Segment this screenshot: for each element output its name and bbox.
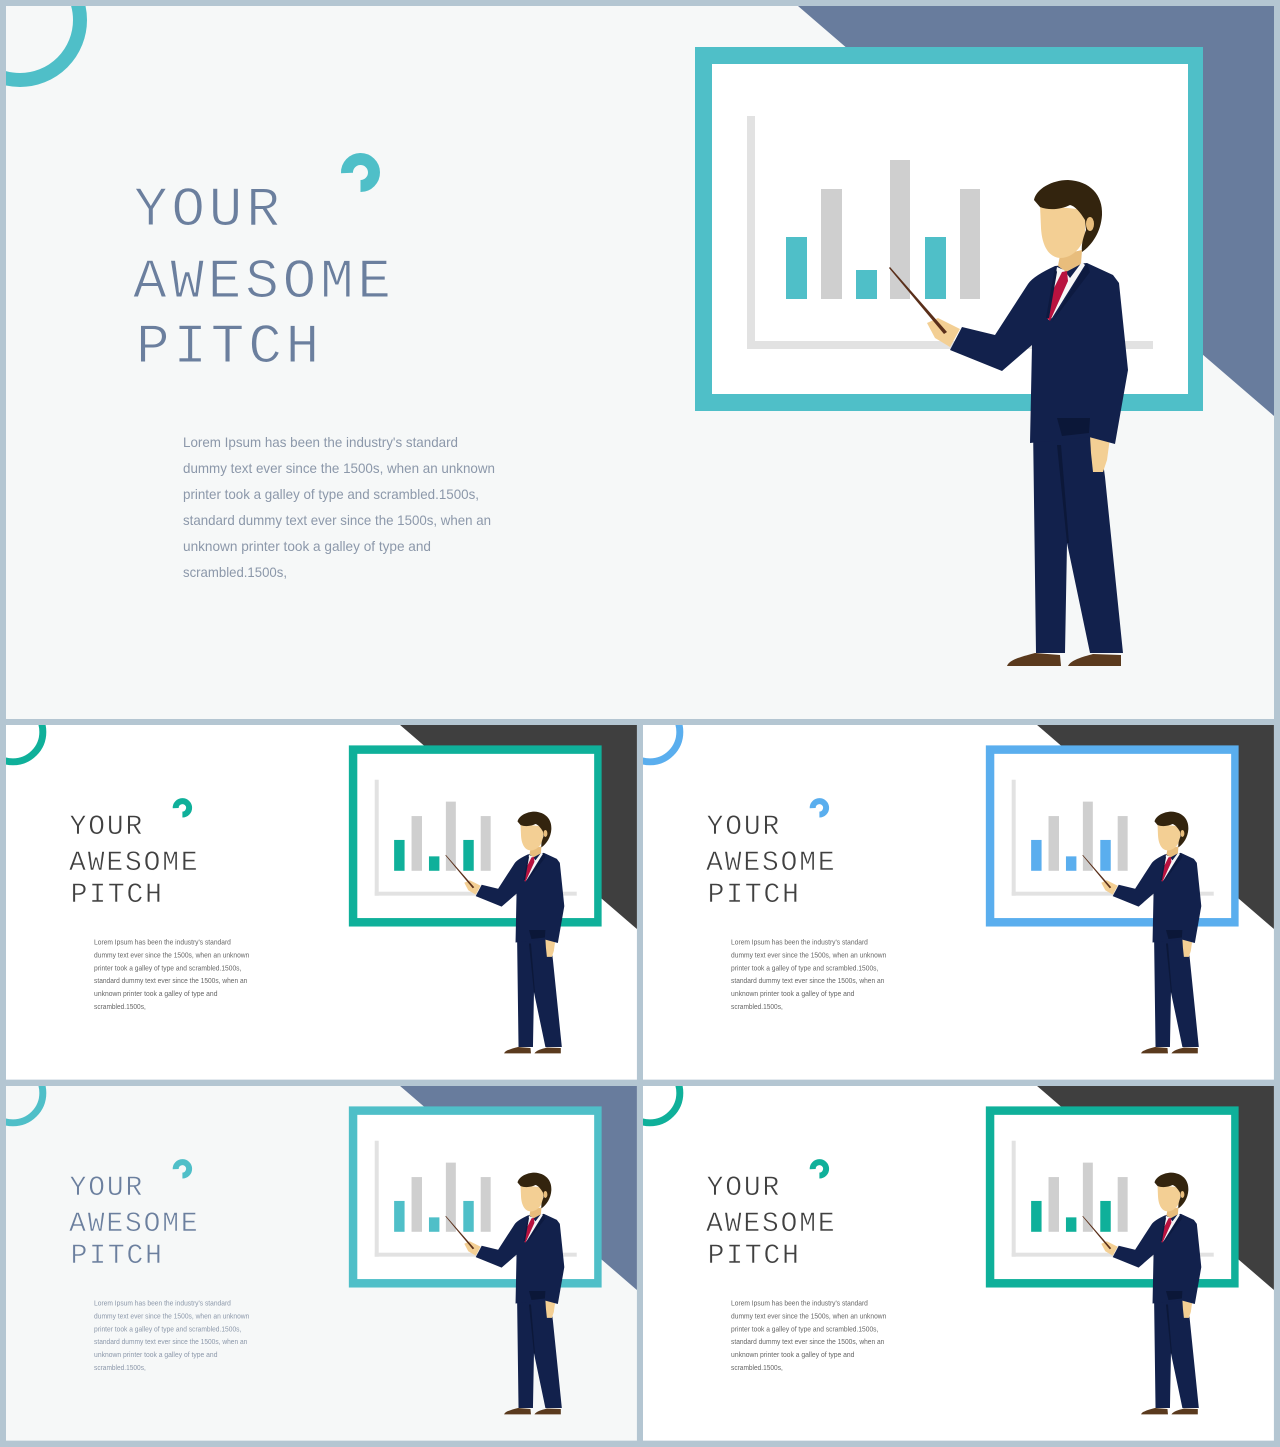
icon: open arc bbox=[813, 801, 826, 815]
text block: printer took a galley of type and scrambled.1500s, bbox=[183, 486, 479, 502]
title: AWESOME bbox=[69, 1209, 199, 1240]
panel: blue slide, top right bbox=[620, 702, 1274, 1080]
title: AWESOME bbox=[133, 250, 395, 314]
text block: standard dummy text ever since the 1500s, when an bbox=[94, 1339, 247, 1346]
icon: open arc bbox=[176, 801, 189, 815]
title: YOUR bbox=[70, 1173, 144, 1204]
title: YOUR bbox=[70, 812, 144, 843]
text block bbox=[183, 434, 495, 580]
icon: open arc bbox=[347, 159, 374, 186]
panel: green slide, top left bbox=[0, 702, 637, 1080]
text block bbox=[94, 939, 249, 1011]
panel: large teal slide bbox=[0, 0, 1274, 719]
board frame bbox=[349, 745, 602, 927]
text block bbox=[731, 939, 886, 1011]
text block: printer took a galley of type and scrambled.1500s, bbox=[731, 965, 878, 972]
board frame bbox=[349, 1106, 602, 1288]
text block: unknown printer took a galley of type and bbox=[94, 1352, 218, 1359]
text block: standard dummy text ever since the 1500s, when an bbox=[731, 1339, 884, 1346]
corner ring bbox=[643, 725, 684, 766]
text block: printer took a galley of type and scrambled.1500s, bbox=[94, 1326, 241, 1333]
bar chart bbox=[747, 116, 1153, 349]
text block: unknown printer took a galley of type and bbox=[94, 991, 218, 998]
text block: standard dummy text ever since the 1500s, when an bbox=[183, 512, 491, 528]
bar chart bbox=[375, 1141, 577, 1257]
presenter figure bbox=[1082, 1173, 1201, 1414]
bar chart bbox=[1012, 1141, 1214, 1257]
text block: standard dummy text ever since the 1500s, when an bbox=[94, 978, 247, 985]
text block: Lorem Ipsum has been the industry's standard bbox=[183, 434, 458, 450]
text block bbox=[94, 1300, 249, 1372]
icon: open arc bbox=[813, 1162, 826, 1176]
text block: Lorem Ipsum has been the industry's standard bbox=[731, 939, 868, 946]
text block: standard dummy text ever since the 1500s, when an bbox=[731, 978, 884, 985]
corner ring bbox=[6, 1086, 46, 1126]
title: YOUR bbox=[707, 812, 781, 843]
text block bbox=[731, 1300, 886, 1372]
text block: dummy text ever since the 1500s, when an unknown bbox=[731, 1313, 886, 1320]
text block: dummy text ever since the 1500s, when an unknown bbox=[731, 952, 886, 959]
text block: printer took a galley of type and scrambled.1500s, bbox=[94, 965, 241, 972]
corner ring bbox=[643, 1086, 684, 1126]
icon: open arc bbox=[176, 1162, 189, 1176]
title: PITCH bbox=[708, 880, 801, 911]
title: PITCH bbox=[708, 1241, 801, 1272]
presenter figure bbox=[445, 812, 564, 1053]
board frame bbox=[986, 745, 1239, 927]
text block: Lorem Ipsum has been the industry's standard bbox=[94, 939, 231, 946]
text block: scrambled.1500s, bbox=[731, 1365, 783, 1372]
corner triangle bbox=[1037, 1086, 1274, 1290]
board frame bbox=[695, 47, 1203, 411]
title bbox=[70, 815, 196, 902]
presenter figure bbox=[445, 1173, 564, 1414]
text block: dummy text ever since the 1500s, when an unknown bbox=[94, 952, 249, 959]
panel: green slide, bottom right bbox=[620, 1063, 1274, 1441]
text block: dummy text ever since the 1500s, when an unknown bbox=[183, 460, 495, 476]
title: YOUR bbox=[134, 178, 284, 242]
text block: scrambled.1500s, bbox=[183, 564, 287, 580]
text block: unknown printer took a galley of type and bbox=[731, 1352, 855, 1359]
title: PITCH bbox=[136, 315, 323, 379]
title: PITCH bbox=[71, 1241, 164, 1272]
corner triangle bbox=[798, 6, 1274, 416]
text block: Lorem Ipsum has been the industry's standard bbox=[731, 1300, 868, 1307]
corner ring bbox=[0, 0, 80, 80]
corner ring bbox=[6, 725, 46, 766]
presenter figure bbox=[1082, 812, 1201, 1053]
title: PITCH bbox=[71, 880, 164, 911]
title: AWESOME bbox=[706, 848, 836, 879]
text block: scrambled.1500s, bbox=[94, 1365, 146, 1372]
text block: printer took a galley of type and scrambled.1500s, bbox=[731, 1326, 878, 1333]
text block: dummy text ever since the 1500s, when an unknown bbox=[94, 1313, 249, 1320]
title: AWESOME bbox=[69, 848, 199, 879]
corner triangle bbox=[1037, 725, 1274, 929]
corner triangle bbox=[400, 1086, 637, 1290]
bar chart bbox=[1012, 780, 1214, 896]
title bbox=[70, 1176, 196, 1263]
text block: unknown printer took a galley of type and bbox=[731, 991, 855, 998]
presenter figure bbox=[889, 180, 1128, 666]
text block: scrambled.1500s, bbox=[731, 1004, 783, 1011]
text block: scrambled.1500s, bbox=[94, 1004, 146, 1011]
title bbox=[706, 815, 833, 902]
corner triangle bbox=[400, 725, 637, 929]
title bbox=[706, 1173, 836, 1272]
title: YOUR bbox=[707, 1173, 781, 1204]
text block: unknown printer took a galley of type and bbox=[183, 538, 431, 554]
panel: teal slide, bottom left bbox=[0, 1063, 637, 1441]
title: AWESOME bbox=[706, 1209, 836, 1240]
bar chart bbox=[375, 780, 577, 896]
title bbox=[134, 188, 388, 362]
board frame bbox=[986, 1106, 1239, 1288]
text block: Lorem Ipsum has been the industry's standard bbox=[94, 1300, 231, 1307]
